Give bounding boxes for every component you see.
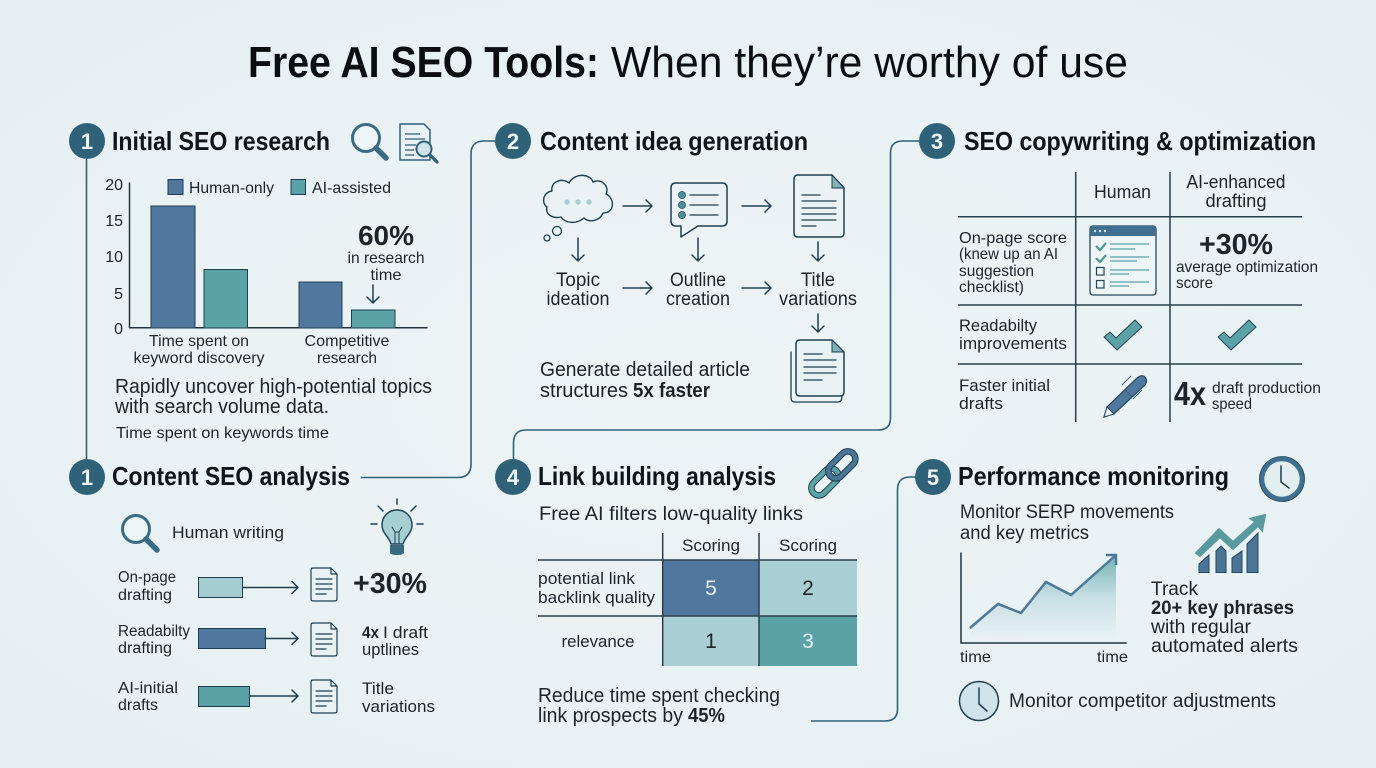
text: description (114, 376, 432, 442)
row: on-page score: (knew up an AI (959, 246, 1058, 263)
text: monitor competitor: Monitor competitor adjustments (1009, 691, 1276, 712)
axis labels: Time spent on (149, 333, 249, 350)
stat: +30%: +30% (1199, 229, 1273, 261)
text: description: Time spent on keywords time (116, 425, 329, 442)
step labels: ideation (546, 289, 610, 310)
icon: check human (1104, 320, 1142, 350)
text: 5x faster (540, 359, 750, 402)
panel: SEO copywriting and optimization (919, 123, 1321, 422)
icon: magnifier (122, 516, 157, 550)
icon: document search (400, 124, 437, 162)
text: human writing: Human writing (172, 523, 284, 542)
stat: 4x (1174, 375, 1321, 413)
row: readability: Readabilty (959, 316, 1037, 335)
row: readability: improvements (959, 334, 1067, 353)
row: AI-initial drafts (118, 679, 435, 716)
row: readability drafting: 4x (362, 623, 379, 642)
axis labels: keyword discovery (134, 350, 264, 367)
scoring table: 1 (705, 630, 717, 653)
badge 5: 5 (927, 465, 939, 490)
legend (168, 180, 391, 197)
icon: chain (808, 448, 858, 498)
text: description: Rapidly uncover high-potential topics (115, 376, 432, 398)
text: reduce time: 45% (688, 705, 725, 727)
axis labels: Competitive (304, 333, 390, 350)
badge 5 (915, 459, 951, 495)
step labels: Title (801, 270, 835, 291)
bar chart: time spent (105, 177, 427, 367)
row: on-page drafting (118, 568, 427, 604)
callout: 60%: time (370, 267, 402, 284)
column headers: drafting (1206, 191, 1266, 211)
row: on-page score: checklist) (959, 279, 1024, 296)
axis labels: research (317, 350, 377, 367)
stat: +30%: score (1176, 275, 1213, 292)
title: Free AI SEO Tools: (248, 38, 599, 87)
stat: +30%: average optimization (1176, 259, 1318, 276)
scoring table: potential link (538, 569, 636, 588)
heading: content SEO analysis: Content SEO analysis (112, 461, 350, 491)
text: 5x faster: 5x faster (633, 380, 710, 402)
text: track: 20+ key phrases (1151, 597, 1294, 619)
badge 2: 2 (507, 129, 519, 154)
text: description: with search volume data. (114, 396, 329, 418)
line chart (960, 553, 1128, 666)
stat: +30% (1176, 229, 1318, 292)
step labels: creation (666, 289, 730, 310)
icon: small clock (960, 682, 998, 720)
badge 2 (495, 123, 531, 159)
callout: 60%: 60% (358, 220, 414, 251)
legend: Human-only (189, 180, 274, 197)
text: track: automated alerts (1151, 635, 1298, 657)
row: readability drafting: Readabilty (118, 623, 190, 640)
text: reduce time: link prospects by (538, 705, 683, 727)
text: monitor SERP (960, 502, 1174, 544)
badge 1 (69, 123, 105, 159)
scoring table (538, 533, 857, 666)
panel: performance monitoring (915, 456, 1304, 720)
text: track: Track (1151, 578, 1198, 600)
panel: initial SEO research (69, 123, 437, 442)
icon: growth chart (1194, 513, 1267, 572)
badge 1: 1 (81, 129, 93, 154)
badge 1 second: 1 (81, 465, 93, 490)
icon: light bulb (371, 499, 423, 555)
badge 3: 3 (931, 129, 943, 154)
text: track: with regular (1150, 616, 1252, 638)
comparison table (958, 172, 1321, 422)
row: readability drafting: uptlines (362, 640, 419, 659)
row: AI-initial drafts: AI-initial (118, 680, 178, 697)
icon: speech list (671, 183, 727, 237)
icon: thought cloud (544, 175, 612, 241)
bar chart: time spent: 0 (114, 321, 123, 338)
text: monitor SERP: Monitor SERP movements (960, 502, 1174, 523)
bar chart: time spent: 5 (114, 286, 123, 303)
row: on-page score: On-page score (959, 230, 1067, 247)
stat: 4x: speed (1212, 396, 1252, 413)
stat: 4x: draft production (1212, 380, 1321, 397)
arrows: flow (572, 200, 824, 332)
step labels: Topic (556, 270, 600, 291)
icon: check AI (1218, 320, 1256, 350)
bar chart: time spent: 15 (105, 213, 123, 230)
column headers: AI-enhanced (1186, 172, 1286, 192)
callout: 60%: in research (348, 250, 424, 267)
panel: content idea generation (495, 123, 857, 402)
connector: section 1b to 2 (361, 141, 496, 478)
icon: document (794, 175, 844, 237)
scoring table: backlink quality (538, 588, 656, 607)
row: readability drafting: I draft (383, 623, 428, 642)
bar chart: time spent: 20 (105, 177, 123, 194)
heading: link building: Link building analysis (538, 461, 776, 491)
row: on-page drafting: On-page (118, 569, 176, 586)
row: AI-initial drafts: drafts (118, 697, 158, 714)
row: on-page drafting: +30% (353, 568, 427, 600)
heading: SEO copywriting: SEO copywriting & optimization (964, 126, 1316, 156)
step labels (546, 270, 857, 310)
icon: magnifier (352, 124, 386, 158)
row: faster drafts: Faster initial (959, 376, 1050, 395)
bar chart: time spent: 10 (105, 249, 123, 266)
text: reduce time: Reduce time spent checking (538, 685, 780, 707)
icon: clock (1260, 456, 1304, 502)
row: readability drafting (118, 623, 428, 659)
scoring table: 5 (705, 577, 717, 600)
row: faster drafts: drafts (959, 394, 1003, 413)
icon: stacked documents (791, 340, 844, 402)
badge 4 (495, 459, 531, 495)
text: monitor SERP: and key metrics (960, 523, 1089, 544)
row: readability drafting: drafting (118, 640, 172, 657)
badge 1 second (69, 459, 105, 495)
line chart: time (960, 649, 991, 666)
connector: section 4 to 5 (811, 477, 916, 721)
row: AI-initial drafts: variations (362, 697, 435, 716)
stat: 4x: 4x (1174, 375, 1207, 412)
scoring table: 3 (802, 630, 814, 653)
heading: performance monitoring: Performance monitoring (958, 461, 1229, 491)
step labels: variations (779, 289, 857, 310)
text: 5x faster: Generate detailed article (540, 359, 750, 381)
line chart: time (1097, 649, 1128, 666)
badge 4: 4 (507, 465, 520, 490)
row: AI-initial drafts: Title (362, 679, 394, 698)
connector: section 1 to 1b (86, 159, 88, 460)
row: on-page score (959, 230, 1067, 296)
heading: content idea generation: Content idea generation (540, 126, 808, 156)
text: 5x faster: structures (540, 380, 628, 402)
title (248, 38, 1128, 87)
title: When they’re worthy of use (611, 38, 1128, 87)
scoring table: Scoring (779, 536, 837, 555)
row: readability (959, 316, 1067, 353)
text: reduce time (538, 685, 780, 727)
connector: section 2 to 4 via 3 (514, 141, 920, 460)
legend: AI-assisted (312, 180, 391, 197)
row: faster drafts (959, 376, 1050, 413)
row: on-page drafting: drafting (118, 587, 172, 604)
panel: link building analysis (495, 448, 858, 727)
scoring table: Scoring (682, 536, 740, 555)
text: track (1150, 578, 1298, 657)
icon: pen (1104, 376, 1146, 417)
panel: content SEO analysis (69, 459, 435, 716)
axis labels (134, 333, 390, 367)
badge 3 (919, 123, 955, 159)
scoring table: 2 (802, 577, 814, 600)
row: on-page score: suggestion (959, 263, 1034, 280)
heading: initial SEO research: Initial SEO research (112, 126, 330, 156)
column headers (1094, 172, 1286, 211)
icon: checklist window (1090, 226, 1156, 295)
scoring table: relevance (562, 632, 634, 651)
text: filters: Free AI filters low-quality links (539, 504, 803, 525)
column headers: Human (1094, 182, 1151, 202)
step labels: Outline (670, 270, 726, 291)
callout: 60% (348, 220, 424, 303)
